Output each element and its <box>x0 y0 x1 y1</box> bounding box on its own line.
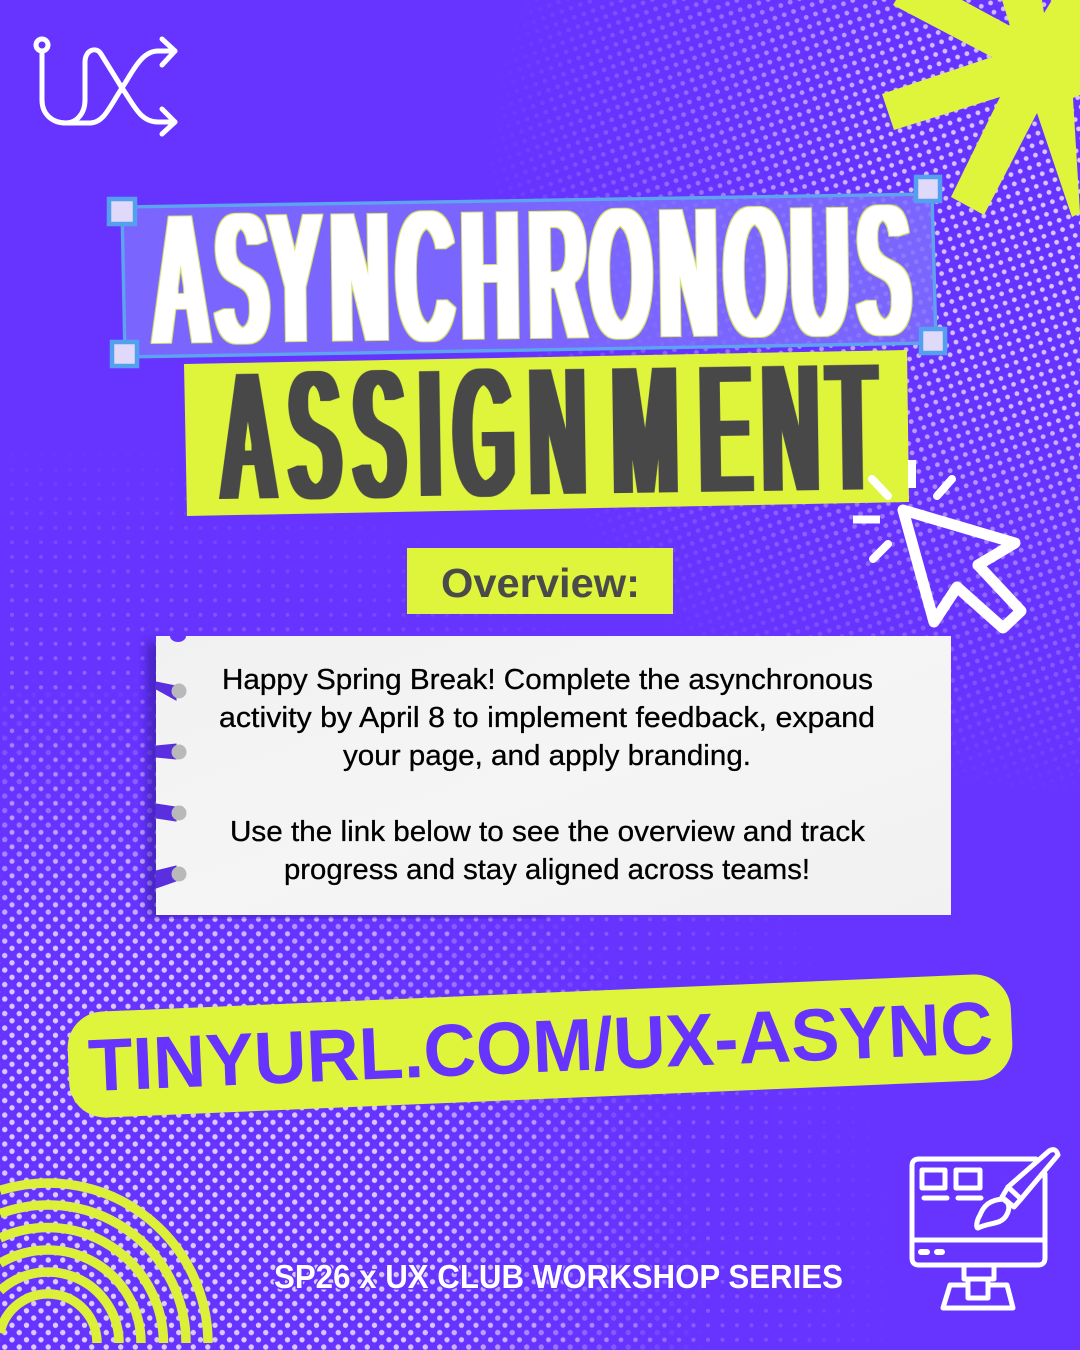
logo: UX arrows <box>36 39 175 134</box>
title: ASSIGNMENT: ASSIGNMENT <box>218 320 878 542</box>
decorative concentric arcs <box>0 1183 208 1343</box>
overview body text: Use the link below to see the overview and track <box>230 816 865 848</box>
icon: clicking cursor <box>853 460 1021 628</box>
overview body text: activity by April 8 to implement feedback, expand <box>219 702 875 734</box>
title block: ASSIGNMENT lime banner <box>184 320 909 542</box>
link banner: TINYURL.COM/UX-ASYNC <box>87 986 994 1107</box>
halftone dots: bottom left <box>0 482 854 1350</box>
title: ASYNCHRONOUS: ASYNCHRONOUS <box>151 163 911 388</box>
overview body text: Happy Spring Break! Complete the asynchronous <box>222 664 873 696</box>
icon: monitor with paintbrush <box>912 1150 1058 1308</box>
selection handle: top left <box>109 199 135 224</box>
overview body text: progress and stay aligned across teams! <box>284 854 810 886</box>
overview body text <box>219 664 875 886</box>
selection handle: bottom left <box>112 342 137 366</box>
selection handle: bottom right <box>921 329 945 353</box>
overview body text: your page, and apply branding. <box>343 740 751 772</box>
selection handle: top right <box>916 177 940 201</box>
notebook holes <box>156 636 186 888</box>
panel: notebook paper overview <box>147 636 951 918</box>
heading: Overview <box>407 548 673 614</box>
footer text: SP26 x UX CLUB WORKSHOP SERIES <box>274 1258 843 1295</box>
icon: lime asterisk <box>882 0 1080 217</box>
halftone dots: top right <box>510 0 1080 770</box>
title block: ASYNCHRONOUS selection box <box>109 163 945 388</box>
heading: Overview: Overview: <box>441 560 640 606</box>
